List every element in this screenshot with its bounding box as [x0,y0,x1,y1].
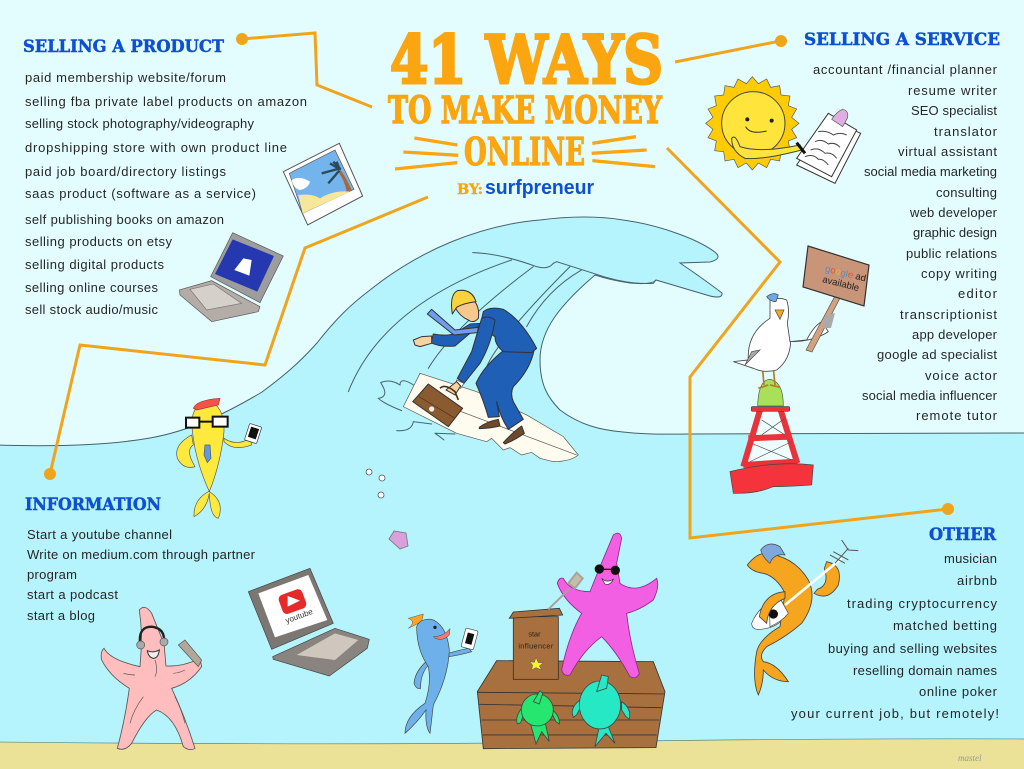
icon: blue fish with phone [405,614,478,733]
sailor hat [767,294,778,302]
icon: seagull on buoy [730,294,828,493]
fish arm [224,438,252,448]
panel: selling a product [23,37,307,317]
microphone [178,640,202,667]
list: paid membership website/forum [25,70,226,85]
list: voice actor [925,368,998,383]
list: selling fba private label products on amazon [25,94,307,109]
list: Write on medium.com through partner [27,547,256,562]
hair [761,544,785,563]
bubbles [366,469,385,498]
arm [814,562,839,596]
list: Start a youtube channel [27,527,172,542]
list: social media influencer [862,388,998,403]
podium label: star [528,630,541,639]
heading: INFORMATION [25,495,161,515]
sun arm [732,137,802,159]
ear cups [137,638,168,649]
phone [461,628,478,650]
fin [414,658,430,689]
wave and sea [0,217,1024,745]
gull wing tip [745,350,760,365]
fish cap [193,398,220,410]
starfish body [101,607,202,750]
icon: sun with notepad [706,77,861,183]
list: google ad specialist [877,347,997,362]
connector dots [44,33,954,515]
beak [433,629,450,639]
connector: other [667,148,948,538]
sun rays [706,77,799,170]
list: online poker [919,684,998,699]
body details [123,660,185,723]
sign text [821,264,867,295]
title [388,21,663,199]
icon: yellow fish with glasses [177,398,262,518]
buoy base [730,464,813,493]
connector: information [50,197,428,474]
list: start a blog [27,608,95,623]
sign post [806,296,840,352]
sunglasses [595,564,620,575]
list: sell stock audio/music [25,302,158,317]
list: selling stock photography/videography [25,116,254,131]
buoy windows [745,412,795,467]
list: remote tutor [916,408,998,423]
list: consulting [936,185,997,200]
title line 3: ONLINE [464,129,585,174]
guitar front [769,598,788,627]
icon: photo polaroid [283,143,363,225]
list: copy writing [921,266,997,281]
icon: orange fish with guitar [747,540,858,695]
heading: SELLING A SERVICE [804,30,1000,50]
crest [408,614,423,628]
gull hand [822,313,835,328]
surfboard [403,373,578,462]
list: selling online courses [25,280,158,295]
podium: influencer [518,641,554,650]
fish body [405,619,449,733]
list: your current job, but remotely! [791,706,999,721]
gull body [733,298,828,371]
magenta starfish [557,533,658,678]
list: reselling domain names [853,663,998,678]
list: matched betting [893,618,997,633]
icon: laptop youtube [248,568,369,676]
arm fin [759,592,785,623]
list: app developer [912,327,998,342]
heading: OTHER [929,525,997,545]
icon: chest with starfish and fish [477,533,665,749]
teal fish [572,675,630,747]
buoy frame [743,410,797,467]
list: program [27,567,77,582]
panel: selling a service [804,30,1000,423]
heading: SELLING A PRODUCT [23,37,224,57]
headstock [830,540,858,563]
connector: selling a product [242,33,372,107]
list: paid job board/directory listings [25,164,226,179]
list: social media marketing [864,164,997,179]
jacket [480,308,537,353]
cuff and front hand [455,380,464,388]
panel: information [25,495,256,623]
signature: mastel [958,753,982,763]
sign board [803,246,869,306]
list: start a podcast [27,587,118,602]
tie [204,445,211,463]
hand [413,336,432,347]
connector lines [50,33,948,538]
podium [509,608,563,679]
title line 2: TO MAKE MONEY [388,88,662,132]
splash lines [378,381,455,440]
icon: surfer on wave [378,290,578,462]
youtube logo [277,588,308,615]
glasses [186,417,228,428]
inner wave lines [348,253,656,392]
list: buying and selling websites [828,641,998,656]
sun face [722,92,785,155]
list: self publishing books on amazon [25,212,224,227]
guitar neck [785,558,842,605]
list: accountant /financial planner [813,62,998,77]
buoy plate [751,407,790,411]
list: selling products on etsy [25,234,172,249]
list [813,62,998,423]
microphone [548,573,583,609]
gull beak [775,310,784,319]
headphones [140,627,164,643]
list: saas product (software as a service) [25,186,256,201]
byline: BY: [457,182,483,198]
title line 1: 41 WAYS [390,21,663,99]
sign text: google ad [824,264,867,284]
shoes [479,419,500,429]
list: virtual assistant [898,144,997,159]
mouth [147,650,159,658]
green fish [517,691,559,744]
phone [244,423,262,444]
connector: selling a service [675,41,780,62]
gull legs [758,368,780,388]
star [530,657,543,670]
hair [452,290,476,314]
buoy top [758,379,783,406]
back arm [431,323,482,346]
fish body [747,553,812,695]
chest [477,661,665,749]
icon: pink shell [389,531,408,549]
list: airbnb [957,573,997,588]
icon: pink starfish with headphones [101,607,202,750]
briefcase [413,384,463,427]
guitar body [752,598,788,629]
notepad [797,113,861,183]
panel: other [791,525,999,721]
fish body [192,402,224,492]
sign text: available [821,274,860,294]
sound hole [769,609,778,619]
list: resume writer [908,83,998,98]
byline: surfpreneur [485,177,594,199]
fish fin [177,435,195,467]
fish tail [194,492,220,518]
title rays [395,137,655,169]
list: musician [944,551,997,566]
sign [803,246,869,352]
sand [0,739,1024,769]
head [455,299,479,322]
list [25,70,307,317]
shell [832,109,848,127]
front arm [457,317,495,383]
fish arm [448,648,472,657]
list: dropshipping store with own product line [25,140,287,155]
list: graphic design [913,225,997,240]
tie [427,309,478,335]
trousers [476,351,534,429]
icon: laptop blue screen [179,233,283,322]
list [791,551,999,721]
list: SEO specialist [911,103,997,118]
youtube label: youtube [284,607,315,625]
list: editor [958,286,998,301]
list: selling digital products [25,257,164,272]
list: transcriptionist [900,307,997,322]
list: public relations [906,246,998,261]
list: translator [934,124,998,139]
list [27,527,256,623]
list: trading cryptocurrency [847,596,998,611]
list: web developer [909,205,998,220]
